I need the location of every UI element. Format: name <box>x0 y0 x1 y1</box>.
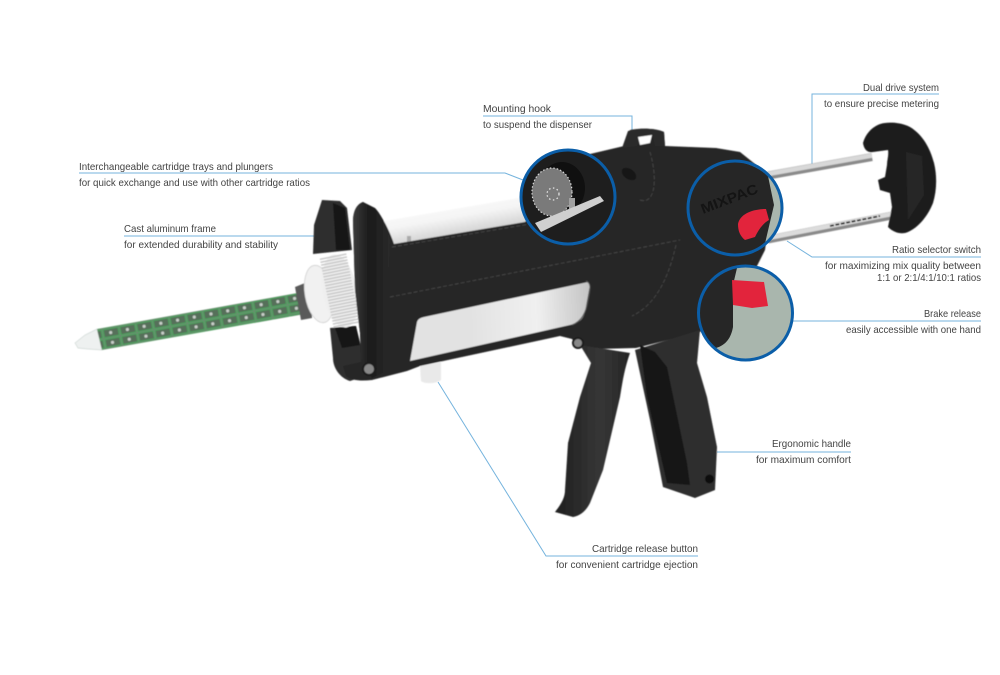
cartridge <box>378 196 535 250</box>
grip recess <box>640 345 690 485</box>
release button <box>420 362 441 383</box>
pivot bolt <box>573 338 583 348</box>
front trigger <box>555 345 630 517</box>
label: brake release: Brake release <box>924 308 981 320</box>
label: ratio selector switch: Ratio selector switch <box>892 244 981 256</box>
label: ratio selector switch: for maximizing mix quality between <box>825 260 981 272</box>
label: mounting hook: to suspend the dispenser <box>483 119 592 131</box>
label: interchangeable trays: Interchangeable cartridge trays and plungers <box>79 161 273 173</box>
white cartridge window <box>410 282 590 361</box>
cap detail <box>906 152 924 220</box>
label: cast aluminum frame: for extended durability and stability <box>124 239 279 251</box>
hook hole <box>638 135 652 145</box>
label: brake release <box>846 308 981 336</box>
cartridge pin <box>407 236 411 244</box>
label: brake release: easily accessible with one hand <box>846 324 981 336</box>
label: interchangeable trays <box>79 161 310 189</box>
red switch <box>738 209 769 240</box>
label: mounting hook <box>483 103 592 131</box>
toothed rack <box>535 196 604 232</box>
label: interchangeable trays: for quick exchange and use with other cartridge ratios <box>79 177 310 189</box>
seams <box>390 152 680 316</box>
label: cartridge release button: for convenient cartridge ejection <box>556 559 698 571</box>
rear grip <box>635 330 717 498</box>
tray bracket <box>569 198 575 210</box>
label: dual drive system: to ensure precise metering <box>824 98 939 110</box>
label: cartridge release button <box>556 543 698 571</box>
main body <box>343 129 772 381</box>
detail circle: brake release <box>698 266 792 360</box>
label: ratio selector switch: 1:1 or 2:1/4:1/10:1 ratios <box>877 272 981 284</box>
tray gear <box>532 168 572 216</box>
detail circle: ratio selector <box>688 161 782 255</box>
front plate <box>353 202 390 378</box>
detail circle: cartridge tray <box>521 150 615 244</box>
label: dual drive system <box>824 82 939 110</box>
body segment <box>688 162 774 255</box>
label: cast aluminum frame <box>124 223 279 251</box>
label: ergonomic handle: Ergonomic handle <box>772 438 851 450</box>
circle outline <box>698 266 792 360</box>
label: cartridge release button: Cartridge release button <box>592 543 698 555</box>
label: dual drive system: Dual drive system <box>863 82 939 94</box>
label: cast aluminum frame: Cast aluminum frame <box>124 223 216 235</box>
rear frame plate <box>313 200 368 381</box>
circle outline <box>521 150 615 244</box>
gear housing <box>539 162 585 214</box>
mounting hook <box>622 129 665 148</box>
logo: MIXPAC <box>698 180 760 217</box>
window frame highlight <box>572 281 590 325</box>
callout lines <box>79 94 981 556</box>
body hole <box>620 165 638 183</box>
body segment <box>698 268 737 348</box>
toothed gear <box>317 252 363 330</box>
plunger rods <box>768 156 892 240</box>
static mixer <box>97 292 310 350</box>
dispenser gun illustration <box>75 123 936 517</box>
front bolt <box>363 363 375 375</box>
gear ribs <box>333 256 347 326</box>
gear centre <box>547 188 559 200</box>
mixer tip <box>75 329 102 350</box>
red brake <box>732 280 768 308</box>
circle outline <box>688 161 782 255</box>
label: ergonomic handle: for maximum comfort <box>756 454 851 466</box>
label: ratio selector switch <box>825 244 981 284</box>
collar <box>300 263 338 325</box>
collar base <box>295 281 312 320</box>
rear plate dark groove <box>333 203 360 348</box>
rear plunger cap <box>863 123 936 233</box>
label: mounting hook: Mounting hook <box>483 103 552 115</box>
grip hole <box>705 474 714 484</box>
label: ergonomic handle <box>756 438 851 466</box>
